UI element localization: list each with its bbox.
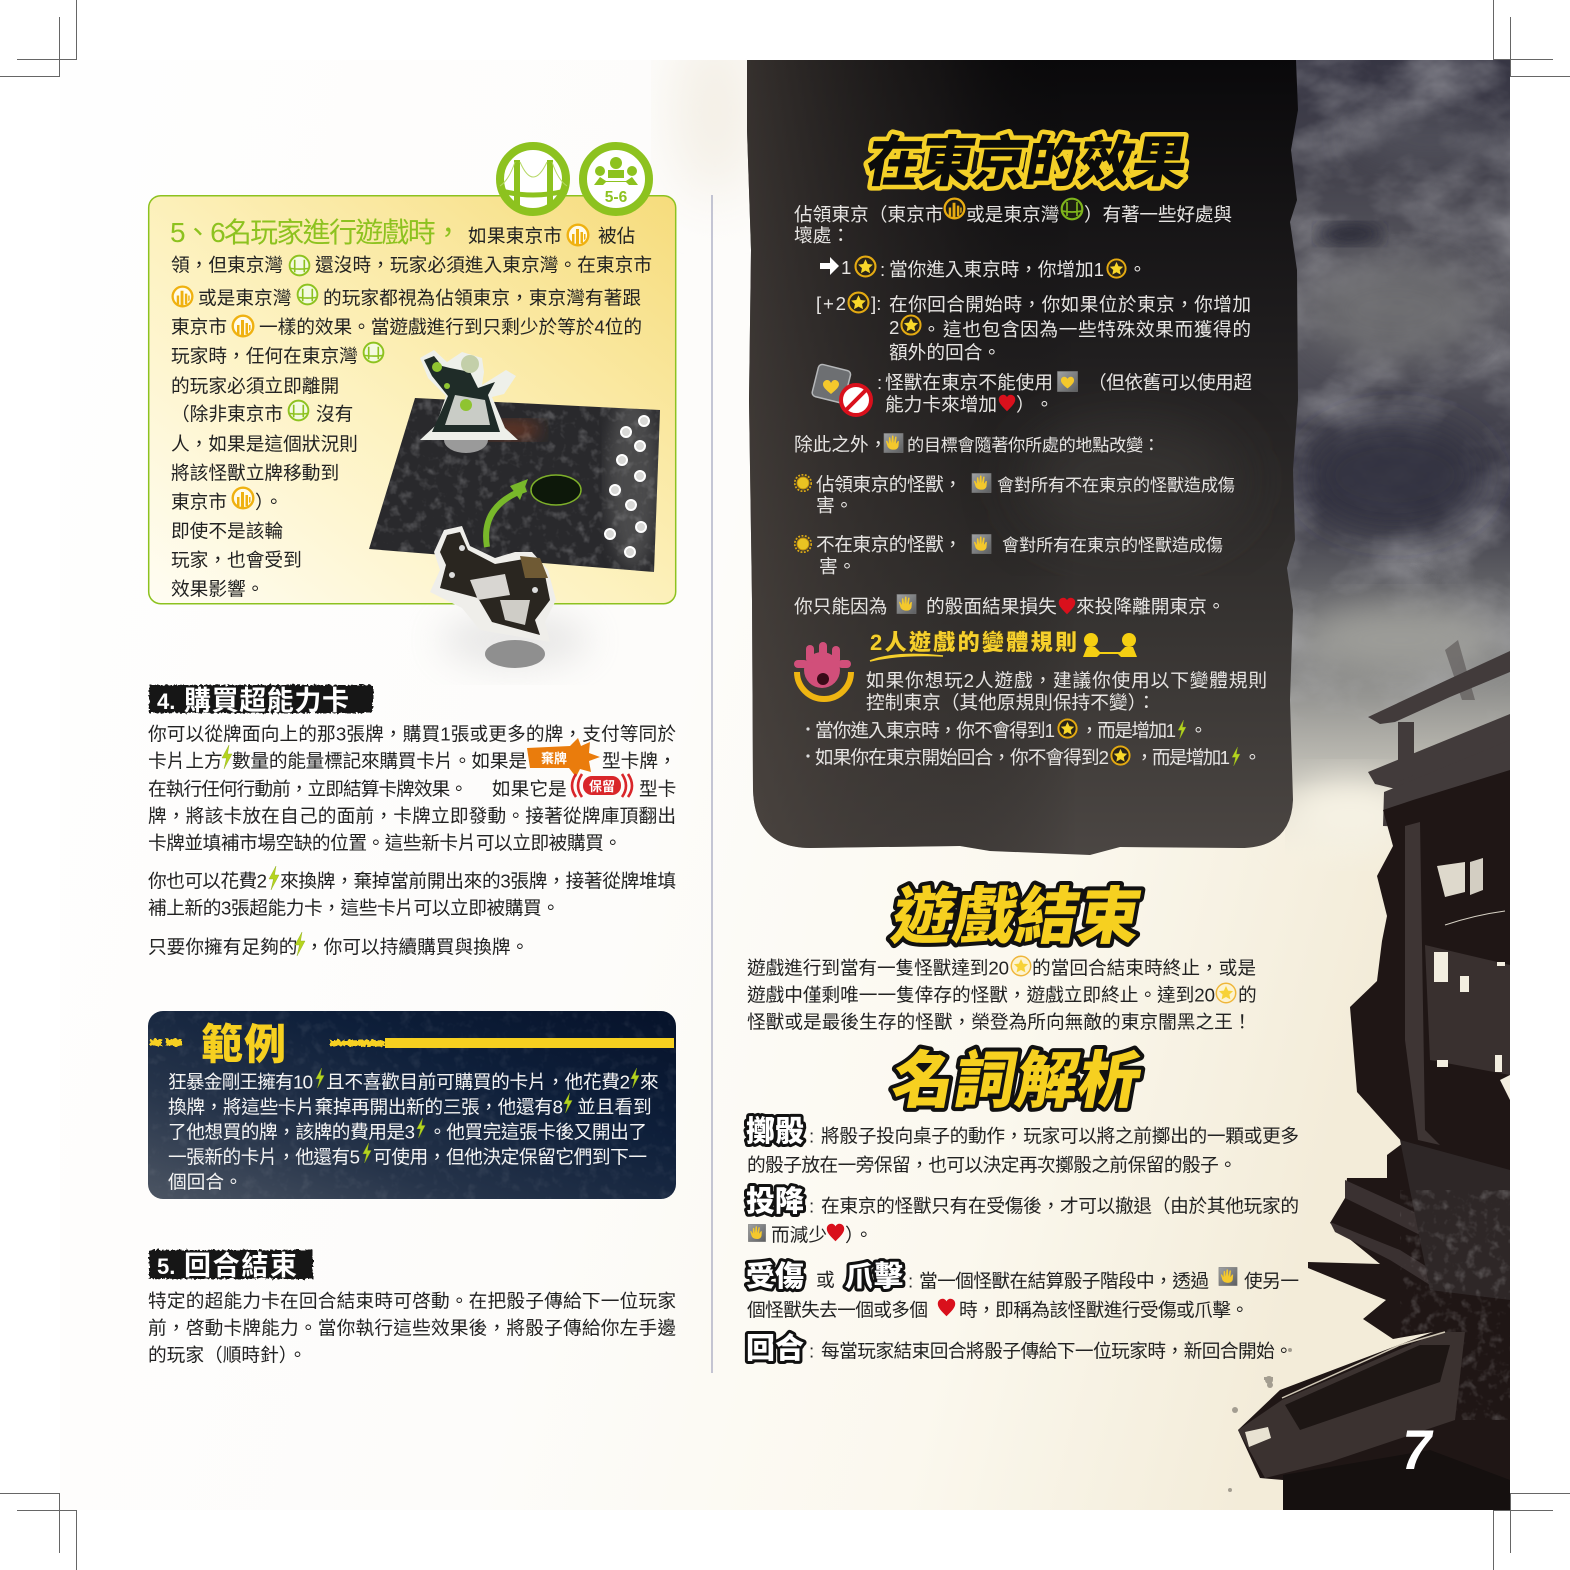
- text block: game end: 遊戲中僅剩唯一一隻倖存的怪獸，遊戲立即終止。達到20: [747, 984, 1215, 1006]
- rule: starting turn in Tokyo: ]:: [871, 293, 881, 314]
- glossary: roll: 將骰子投向桌子的動作，玩家可以將之前擲出的一顆或更多: [821, 1126, 1299, 1146]
- text block: claw targets: 來投降離開東京。: [1076, 596, 1226, 617]
- text block: 5-6 player rule: 東京市: [171, 492, 227, 512]
- game board illustration: [369, 398, 660, 572]
- background illustration: cloudy sky and ruined city: [1228, 60, 1510, 1510]
- text block: game end: 的: [1238, 984, 1257, 1006]
- text block: claw targets: 佔領東京的怪獸，: [816, 474, 962, 495]
- text block: 5-6 player rule: 或是東京灣: [198, 288, 291, 308]
- rule: starting turn in Tokyo: [+2: [816, 293, 846, 314]
- text block: example: 來: [640, 1072, 659, 1092]
- icon: energy: [631, 1068, 639, 1088]
- text block: game end: [747, 956, 1257, 1032]
- glossary: damage or claw: 使另一: [1244, 1270, 1299, 1292]
- text block: 5-6 player rule: 如果東京市: [468, 226, 562, 246]
- icon: energy: [1232, 747, 1240, 766]
- icon: victory point: [856, 257, 875, 276]
- section heading: 4 buy power cards: 購買超能力卡: [184, 686, 350, 716]
- glossary: turn: :: [809, 1340, 814, 1362]
- variant: two player rules: [794, 630, 1267, 768]
- lit windows: [1434, 858, 1510, 1100]
- icon: Tokyo City: [568, 225, 588, 245]
- icon: energy: [269, 866, 279, 890]
- icon: pink claw: [794, 642, 851, 699]
- icon: victory point: [849, 293, 868, 312]
- text block: Tokyo effects intro: 或是東京灣: [966, 204, 1059, 225]
- rule: entering Tokyo: [820, 257, 1147, 280]
- icon: Tokyo Bay: [290, 256, 309, 275]
- icon: Tokyo City: [945, 199, 964, 218]
- text block: buying cards: 型卡牌，: [602, 750, 677, 772]
- text block: Tokyo effects intro: 佔領東京（東京市: [794, 204, 944, 225]
- section heading: 5 end of turn: 回合結束: [184, 1251, 298, 1281]
- arrow: move to Tokyo: [486, 489, 526, 547]
- text block: buying cards: 型卡: [639, 778, 676, 800]
- icon: victory point: [1216, 983, 1236, 1003]
- glossary: damage or claw: 個怪獸失去一個或多個: [747, 1300, 928, 1320]
- glossary: surrender: 投降: [746, 1185, 804, 1218]
- text block: buying cards: [148, 724, 677, 958]
- text block: example: 並且看到: [577, 1096, 652, 1118]
- text block: 5-6 player rule: 的玩家必須立即離開: [171, 376, 339, 396]
- title: game end: 遊戲結束: [887, 882, 1147, 952]
- panel: effects in Tokyo: [747, 60, 1298, 855]
- glossary: damage or claw: 時，即稱為該怪獸進行受傷或爪擊。: [959, 1300, 1249, 1320]
- icon: Tokyo Bay: [1062, 199, 1082, 219]
- panel: 5-6 player rules: [149, 146, 676, 668]
- badge: keep: [572, 774, 632, 797]
- glossary: surrender: 而減少: [771, 1224, 827, 1246]
- rule: no healing in Tokyo: ）: [1016, 394, 1035, 415]
- text block: claw targets: 會對所有不在東京的怪獸造成傷: [997, 475, 1235, 495]
- rule: starting turn in Tokyo: 這也包含因為一些特殊效果而獲得的: [943, 319, 1251, 340]
- text block: 5-6 player rule: 被佔: [598, 226, 635, 246]
- text block: buying cards: 如果它是: [492, 778, 567, 800]
- text block: 5-6 player rule: （除非東京市: [171, 404, 283, 424]
- monster standee: top: [420, 350, 518, 453]
- title: glossary: 名詞解析: [887, 1046, 1147, 1116]
- icon: 5-6 players badge: 5-6: [605, 189, 628, 206]
- icon: victory point: [1011, 956, 1031, 976]
- text block: example: 狂暴金剛王擁有10: [168, 1072, 313, 1092]
- text block: example: 且不喜歡目前可購買的卡片，他花費2: [326, 1072, 630, 1092]
- icon: heart: [938, 1299, 955, 1316]
- text block: game end: 遊戲進行到當有一隻怪獸達到20: [747, 958, 1009, 978]
- text block: claw targets: 你只能因為: [794, 596, 887, 617]
- text block: claw targets: 的目標會隨著你所處的地點改變：: [907, 435, 1160, 455]
- glossary: roll: 的骰子放在一旁保留，也可以決定再次擲骰之前保留的骰子。: [747, 1154, 1237, 1176]
- text block: 5-6 player rule: 還沒時，玩家必須進入東京灣。在東京市: [315, 254, 652, 276]
- page number: 7: [1396, 1418, 1438, 1481]
- glossary: surrender: ）。: [845, 1224, 873, 1246]
- text block: claw targets: 害。: [819, 556, 856, 577]
- text block: 5-6 player rule: 的玩家都視為佔領東京，東京灣有著跟: [323, 288, 641, 308]
- glossary: turn: 每當玩家結束回合將骰子傳給下一位玩家時，新回合開始。: [821, 1340, 1293, 1362]
- glossary: surrender: [746, 1185, 1299, 1246]
- text block: game end: 怪獸或是最後生存的怪獸，榮登為所向無敵的東京闇黑之王！: [747, 1012, 1252, 1032]
- heading: two player variant: 2人遊戲的變體規則: [870, 630, 1077, 655]
- rule: no healing in Tokyo: :: [877, 372, 882, 393]
- icon: Tokyo City: [233, 316, 253, 336]
- text block: 5-6 player rule: 東京市: [171, 316, 227, 338]
- text block: buying cards: 你也可以花費2: [148, 870, 267, 892]
- variant: two player rules: 。: [1243, 747, 1262, 768]
- text block: 5-6 player rule: 沒有: [316, 404, 353, 424]
- glossary: damage or claw: 當一個怪獸在結算骰子階段中，透過: [919, 1270, 1209, 1292]
- glossary: roll: [746, 1115, 1299, 1176]
- variant: two player rules: ，而是增加1: [1135, 747, 1230, 768]
- glossary: surrender: 在東京的怪獸只有在受傷後，才可以撤退（由於其他玩家的: [821, 1196, 1299, 1216]
- variant: two player rules: 當你進入東京時，你不會得到1: [815, 720, 1055, 741]
- icon: claw die: [972, 534, 991, 554]
- icon: energy: [316, 1068, 324, 1088]
- variant: two player rules: 控制東京（其他原規則保持不變）：: [866, 692, 1156, 713]
- icon: bullet: [795, 475, 811, 491]
- icon: heart: [1059, 598, 1075, 614]
- text block: 5-6 player rule: 領，但東京灣: [171, 254, 283, 276]
- section heading: 5 end of turn: [149, 1250, 313, 1281]
- rule: no healing in Tokyo: 能力卡來增加: [885, 394, 997, 415]
- ruined building silhouette: [1238, 770, 1510, 1510]
- rule: starting turn in Tokyo: [816, 293, 1251, 363]
- icon: Tokyo City: [233, 488, 253, 508]
- icon: Tokyo Bay: [298, 285, 317, 304]
- text block: claw targets: 不在東京的怪獸，: [816, 534, 962, 555]
- glossary: damage or claw: 爪擊: [845, 1260, 903, 1293]
- icon: bullet: [795, 536, 811, 552]
- glossary: damage or claw: 受傷: [746, 1260, 804, 1293]
- icon: victory point: [901, 315, 921, 335]
- text block: 5-6 player rule: 玩家時，任何在東京灣: [171, 346, 358, 366]
- glossary: turn: 回合: [746, 1332, 804, 1365]
- rule: entering Tokyo: 。: [1128, 259, 1147, 280]
- text block: Tokyo effects intro: 壞處：: [794, 225, 850, 246]
- text block: end of turn: 的玩家（順時針）。: [148, 1344, 307, 1366]
- icon: energy: [1178, 720, 1186, 739]
- text block: claw targets: 害。: [816, 495, 853, 516]
- icon: Tokyo Bay badge: [500, 146, 567, 212]
- glossary: damage or claw: 或: [816, 1270, 835, 1290]
- heading: example: 範例: [201, 1021, 286, 1068]
- text block: example: 了他想買的牌，該牌的費用是3: [168, 1122, 415, 1142]
- text block: buying cards: 你可以從牌面向上的那3張牌，購買1張或更多的牌，支付等同於: [148, 724, 676, 744]
- variant: two player rules: 如果你想玩2人遊戲，建議你使用以下變體規則: [866, 670, 1267, 691]
- icon: energy: [363, 1143, 371, 1163]
- text block: game end: 的當回合結束時終止，或是: [1032, 958, 1256, 978]
- text block: buying cards: 數量的能量標記來購買卡片。如果是: [232, 750, 527, 772]
- icon: Tokyo Bay: [364, 343, 383, 362]
- icon: claw die: [884, 433, 903, 453]
- heading: 5-6 players: 5、6名玩家進行遊戲時，: [170, 217, 462, 248]
- text block: example: 可使用，但他決定保留它們到下一: [373, 1146, 647, 1168]
- title: effects in Tokyo: 在東京的效果: [862, 131, 1193, 193]
- icon: energy: [222, 745, 232, 769]
- text block: buying cards: 在執行任何行動前，立即結算卡牌效果。: [148, 778, 468, 800]
- icon: victory point: [1107, 259, 1126, 278]
- panel: example: [148, 1011, 676, 1199]
- text block: end of turn: 前，啓動卡牌能力。當你執行這些效果後，將骰子傳給你左手邊: [148, 1318, 676, 1338]
- glossary: roll: 擲骰: [746, 1115, 804, 1148]
- text block: buying cards: 牌，將該卡放在自己的面前，卡牌立即發動。接著從牌庫頂翻出: [148, 806, 676, 826]
- variant: two player rules: 。: [1189, 720, 1208, 741]
- text block: claw targets: 除此之外，: [794, 434, 887, 455]
- text block: example: 。他買完這張卡後又開出了: [428, 1122, 647, 1142]
- text block: claw targets: 的骰面結果損失: [926, 596, 1057, 617]
- rubble: [1400, 1190, 1510, 1420]
- icon: heart die crossed out: [811, 364, 871, 415]
- section heading: 4 buy power cards: 4.: [157, 689, 175, 714]
- text block: 5-6 player rule: 效果影響。: [171, 578, 264, 600]
- text block: buying cards: 卡片上方: [148, 750, 223, 772]
- icon: energy: [295, 932, 305, 956]
- icon: claw die: [972, 473, 991, 493]
- crashed bus: [1238, 1332, 1510, 1510]
- rule: starting turn in Tokyo: 。: [922, 319, 941, 340]
- text block: example: 個回合。: [168, 1172, 243, 1192]
- icon: Tokyo Bay: [289, 401, 308, 420]
- rule: entering Tokyo: :: [880, 259, 885, 280]
- text block: 5-6 player rule: 玩家，也會受到: [171, 550, 302, 570]
- icon: energy: [417, 1118, 425, 1138]
- text block: example: 換牌，將這些卡片棄掉再開出新的三張，他還有8: [168, 1096, 563, 1118]
- badge: keep: 保留: [589, 779, 615, 794]
- icon: heart die: [1057, 371, 1078, 392]
- text block: buying cards: 卡牌並填補市場空缺的位置。這些新卡片可以立即被購買。: [148, 832, 622, 854]
- variant: two player rules: ，而是增加1: [1080, 720, 1176, 741]
- page background: [576, 60, 1432, 1510]
- rule: no healing in Tokyo: 。: [1035, 394, 1054, 415]
- icon: victory point: [1111, 746, 1130, 765]
- text block: 5-6 player rule: 人，如果是這個狀況則: [171, 434, 358, 454]
- icon: Tokyo City: [173, 287, 192, 306]
- badge: discard: [527, 738, 600, 777]
- text block: buying cards: 只要你擁有足夠的: [148, 936, 298, 958]
- icon: arrow: [820, 257, 839, 275]
- text block: Tokyo effects intro: ）有著一些好處與: [1084, 204, 1232, 225]
- glossary: damage or claw: :: [908, 1270, 913, 1292]
- variant: two player rules: 如果你在東京開始回合，你不會得到2: [815, 747, 1109, 768]
- glossary: surrender: :: [809, 1196, 814, 1216]
- section heading: 5 end of turn: 5.: [157, 1254, 175, 1279]
- text block: end of turn: [148, 1290, 676, 1366]
- text block: buying cards: 來換牌，棄掉當前開出來的3張牌，接著從牌堆填: [280, 870, 676, 892]
- text block: claw targets: 會對所有在東京的怪獸造成傷: [1002, 535, 1223, 555]
- monster standee: bottom: [430, 526, 556, 668]
- text block: 5-6 player rule: 一樣的效果。當遊戲進行到只剩少於等於4位的: [259, 316, 642, 338]
- icon: two players: [1083, 633, 1137, 657]
- icon: claw die: [897, 594, 916, 614]
- text block: Tokyo effects intro: [794, 199, 1232, 246]
- yellow stripe: [150, 1038, 674, 1048]
- rule: no healing in Tokyo: [811, 364, 1252, 415]
- text block: 5-6 player rule: 將該怪獸立牌移動到: [171, 462, 339, 484]
- text block: buying cards: 補上新的3張超能力卡，這些卡片可以立即被購買。: [148, 898, 560, 918]
- text block: 5-6 player rule: ）。: [255, 492, 283, 512]
- icon: energy: [564, 1093, 572, 1113]
- text block: end of turn: 特定的超能力卡在回合結束時可啓動。在把骰子傳給下一位玩家: [148, 1290, 676, 1312]
- rule: starting turn in Tokyo: 額外的回合。: [889, 342, 1001, 363]
- column divider: [711, 195, 713, 1373]
- glossary: roll: :: [809, 1126, 814, 1146]
- debris specks: [1228, 1348, 1292, 1492]
- badge: discard: 棄牌: [541, 751, 567, 766]
- icon: 5-6 players badge: [583, 146, 649, 212]
- icon: heart: [827, 1224, 844, 1241]
- text block: 5-6 player rule: 即使不是該輪: [171, 520, 283, 542]
- text block: buying cards: ，你可以持續購買與換牌。: [305, 936, 529, 958]
- rule: starting turn in Tokyo: 在你回合開始時，你如果位於東京，你增加: [889, 294, 1251, 315]
- Tokyo Bay space: [531, 475, 581, 505]
- rule: no healing in Tokyo: 怪獸在東京不能使用: [885, 372, 1053, 393]
- rule: entering Tokyo: 當你進入東京時，你增加1: [889, 259, 1104, 280]
- text block: 5-6 player rule: [171, 225, 652, 599]
- icon: heart: [999, 395, 1015, 411]
- text block: example: [168, 1068, 659, 1192]
- ruined skyscraper upper beams: [1368, 640, 1510, 830]
- icon: claw die: [1219, 1267, 1237, 1286]
- glossary: turn: [746, 1332, 1293, 1365]
- icon: claw die: [748, 1224, 766, 1242]
- icon: victory point: [1058, 719, 1077, 738]
- rule: starting turn in Tokyo: 2: [889, 317, 899, 338]
- rule: no healing in Tokyo: （但依舊可以使用超: [1088, 372, 1252, 393]
- text block: example: 一張新的卡片，他還有5: [168, 1146, 360, 1168]
- glossary: damage or claw: [746, 1260, 1299, 1320]
- text block: claw targets: [794, 433, 1235, 617]
- rule: entering Tokyo: 1: [841, 257, 851, 278]
